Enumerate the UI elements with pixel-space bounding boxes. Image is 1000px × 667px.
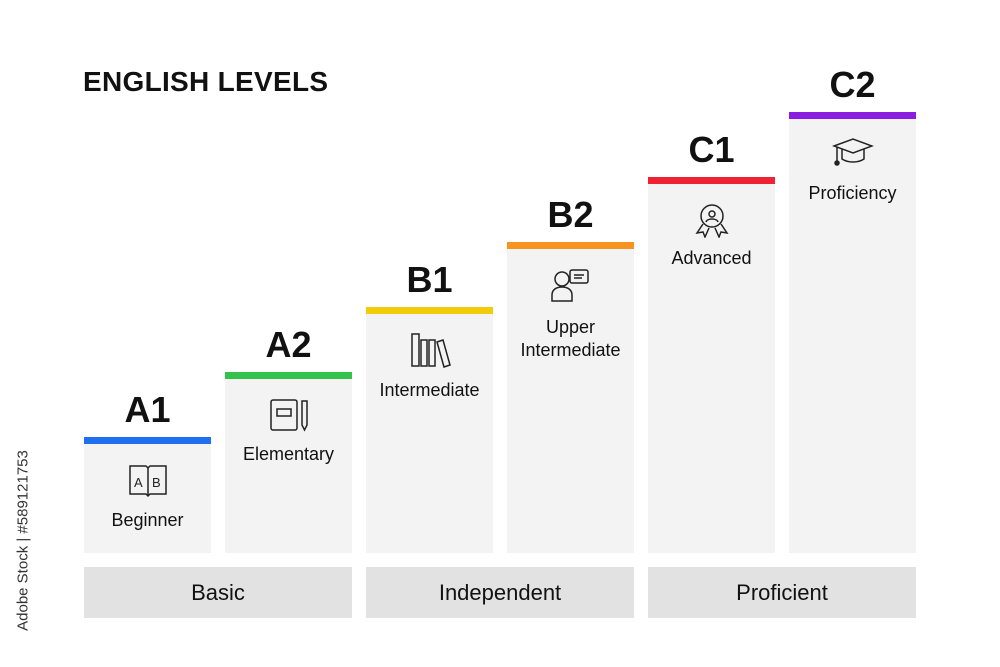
column B2 [507,242,634,553]
category: Proficient [648,567,916,618]
column A2 [225,372,352,553]
column C2 [789,112,916,553]
watermark text: Adobe Stock | #589121753 [14,450,32,631]
level label A2: A2 [265,324,312,365]
category: Independent [366,567,634,618]
icon: open book: B [152,475,161,490]
icon: open book: A [134,475,143,490]
icon: graduation cap [832,138,874,166]
text: Upper Intermediate: Intermediate [520,340,621,360]
text: Beginner: Beginner [111,510,184,530]
level label A1: A1 [124,389,171,430]
level label B1: B1 [406,259,453,300]
column C1 [648,177,775,553]
level label C1: C1 [688,129,735,170]
text: Upper Intermediate [520,317,621,360]
icon: books [411,333,451,368]
category: Basic: Basic [191,580,245,605]
category: Basic [84,567,352,618]
text: Upper Intermediate: Upper [546,317,595,337]
title: ENGLISH LEVELS [83,66,328,97]
text: Elementary: Elementary [243,444,334,464]
icon: open book [129,465,167,497]
column A1 [84,437,211,553]
icon: notebook and pen [270,399,308,432]
text: Proficiency: Proficiency [808,183,897,203]
icon: award badge [696,204,728,238]
level label C2: C2 [829,64,876,105]
text: Intermediate: Intermediate [379,380,480,400]
level label B2: B2 [547,194,594,235]
icon: speaker with speech bubble [551,269,589,302]
category: Proficient: Proficient [736,580,828,605]
text: Advanced: Advanced [671,248,752,268]
column B1 [366,307,493,553]
category: Independent: Independent [439,580,561,605]
